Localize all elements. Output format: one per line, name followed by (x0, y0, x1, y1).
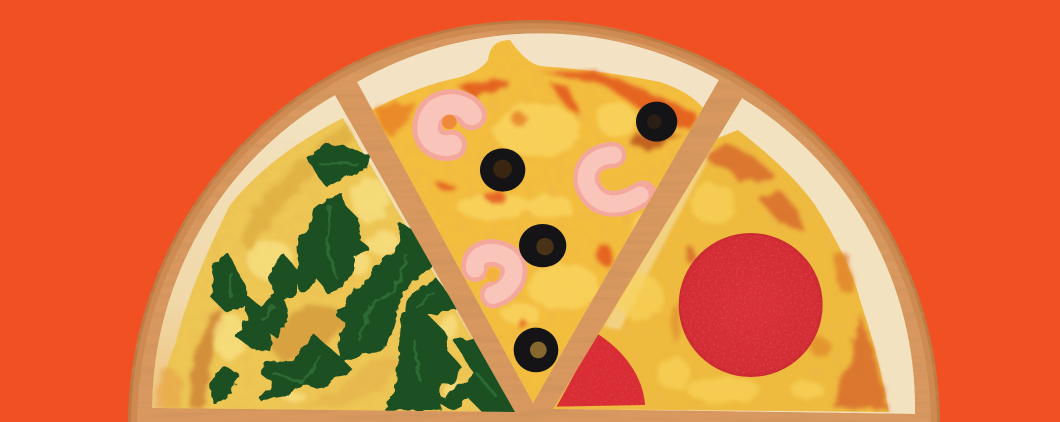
wooden board (128, 20, 940, 422)
slice: shrimp and olive pizza (357, 33, 719, 403)
cheese (163, 118, 515, 412)
olives (480, 102, 677, 372)
melted cheese highlights (617, 183, 823, 403)
slice: salami pizza (553, 98, 915, 414)
salami large (679, 233, 823, 377)
browned cheese patches (157, 123, 400, 408)
melted cheese highlights (213, 177, 463, 402)
slice: spinach pizza (152, 95, 515, 412)
cheese (553, 130, 889, 412)
baked sauce patches (671, 143, 888, 410)
salami small (557, 333, 645, 407)
crust (553, 98, 915, 414)
crust (152, 95, 515, 412)
shrimp 3 (475, 253, 514, 295)
shrimp 1 (427, 104, 472, 146)
pale left edge (603, 147, 713, 330)
spinach leaves (212, 146, 515, 412)
tomato sauce patches (375, 72, 697, 327)
shrimp (427, 104, 643, 295)
pizza illustration (128, 20, 940, 422)
spinach veins (230, 163, 497, 397)
shrimp 2 (586, 155, 643, 204)
cheese (372, 40, 703, 403)
melted cheese highlights (457, 103, 653, 323)
crust (357, 33, 719, 403)
